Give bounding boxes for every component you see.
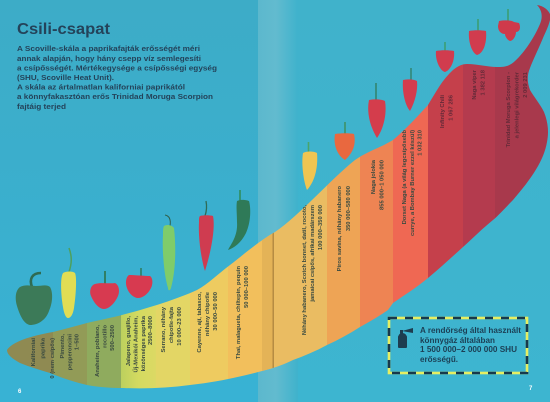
scale label: Piros savina: 350 000–580 000 — [346, 186, 352, 231]
icon: red chili 6 — [469, 19, 486, 55]
scale label: habanero: Néhány habanero, Scotch bonnet, datil, rocoto, — [302, 205, 308, 335]
icon: orange chili — [335, 122, 355, 160]
scale label: Naga jolokia: 855 000–1 050 000 — [380, 160, 386, 210]
scale label: Dorset Naga: 1 032 310 — [418, 130, 424, 156]
scale label: Naga jolokia: Naga jolokia — [371, 160, 377, 194]
callout text: erősségű. — [420, 354, 458, 364]
scale label: Pimento: 1–500 — [75, 334, 81, 350]
scale label: Serrano: Serrano, néhány — [161, 307, 167, 352]
title: Csili-csapat — [17, 21, 110, 38]
scale label: Jalapeño: 2500–8000 — [148, 316, 154, 345]
scale label: Infinity Chili: 1 067 286 — [448, 94, 454, 121]
scale label: Trinidad Moruga Scorpion: a jelenlegi világrekorder — [514, 71, 520, 138]
scale label: Kaliforniai paprika: paprika — [40, 337, 46, 359]
icon: red cayenne — [199, 201, 214, 271]
icon: Trinidad Scorpion pepper — [498, 9, 520, 41]
callout text: A rendőrség által használt — [420, 325, 521, 335]
page number 6: 6 — [18, 389, 22, 395]
scale label: Piros savina: Piros savina, néhány habanero — [337, 186, 343, 271]
scale label: Cayenne: Cayenne, ají, tabasco, — [197, 292, 203, 353]
scale label: Jalapeño: Új-Mexikói Anaheim, — [132, 316, 139, 372]
icon: red chili 4 — [403, 68, 417, 111]
scale label: Serrano: 10 000–23 000 — [177, 307, 183, 346]
callout text — [420, 325, 521, 364]
scale label: Jalapeño: közönséges paprika — [141, 315, 147, 371]
icon: yellow pimento pepper — [61, 248, 76, 318]
callout: police tear gas — [389, 318, 527, 373]
intro text block — [17, 44, 217, 111]
scale label: Thai: 50 000–100 000 — [244, 266, 250, 308]
scale label: Pimento: pepperoncini — [67, 334, 73, 370]
icon: yellow chili — [302, 142, 317, 190]
scale label: Cayenne: néhány chipotle — [205, 291, 211, 336]
intro text block: (SHU, Scoville Heat Unit). — [17, 73, 114, 82]
scale label: habanero: jamaicai csípős, afrikai madárszem — [310, 205, 316, 303]
icon: dark green chili — [228, 190, 250, 250]
scale label: Trinidad Moruga Scorpion: Trinidad Moruga Scorpion - — [506, 72, 512, 147]
page number 7: 7 — [529, 386, 533, 392]
scale label: Kaliforniai paprika: 0 (nem csípős) — [50, 338, 56, 379]
scale label: habanero: 100 000–350 000 — [318, 205, 324, 250]
icon: green bell pepper — [16, 273, 52, 325]
scale label: Dorset Naga: Dorset Naga (a világ legcsípősebb — [402, 130, 408, 224]
scale label: Jalapeño: Jalapeno, guajillo, — [126, 316, 132, 366]
callout text: könnygáz általában — [420, 335, 495, 345]
intro text block: A skála az ártalmatlan kaliforniai paprikától — [17, 82, 185, 92]
icon: red chili 5 — [436, 42, 454, 72]
scale label: Serrano: chipotle-fajta — [169, 306, 175, 343]
scale label: Trinidad Moruga Scorpion: 2 009 231 — [523, 71, 529, 98]
intro text block: annak alapján, hogy hány csepp víz semlegesíti — [17, 54, 201, 63]
scale label: Dorset Naga: currye, a Bombay Burner ezzel készül) — [410, 130, 416, 236]
scale label: Thai: Thai, malagueta, chiltepin, pequin — [236, 266, 242, 359]
icon: red chili 3 — [368, 83, 386, 138]
intro text block: a csípősségét. Mértékegysége a csípősségi egység — [17, 64, 217, 72]
scale label: Infinity Chili: Infinity Chili — [440, 95, 446, 128]
scale label: Anaheim: 500–2500 — [110, 325, 116, 351]
intro text block: a könnyfakasztóan erős Trinidad Moruga Scorpion — [17, 92, 213, 101]
intro text block: A Scoville-skála a paprikafajták erősségét méri — [17, 44, 200, 53]
scale label: Cayenne: 30 000–50 000 — [213, 292, 219, 331]
scale label: Kaliforniai paprika: Kaliforniai — [31, 338, 37, 366]
scale label: Anaheim: Anaheim, poblano, — [95, 325, 101, 377]
scale label: Pimento: Pimento, — [60, 334, 66, 358]
scale label: Anaheim: rocotillo — [103, 325, 109, 348]
scale label: Naga viper: 1 382 118 — [480, 69, 486, 95]
callout text: 1 500 000–2 000 000 SHU — [420, 344, 517, 354]
icon: red chili 2 — [126, 268, 152, 298]
scale label: Naga viper: Naga viper — [472, 70, 478, 100]
icon: green serrano — [163, 215, 175, 290]
intro text block: fajtáig terjed — [17, 102, 66, 111]
icon: spray can — [398, 328, 413, 348]
icon: red round chili — [90, 271, 119, 309]
